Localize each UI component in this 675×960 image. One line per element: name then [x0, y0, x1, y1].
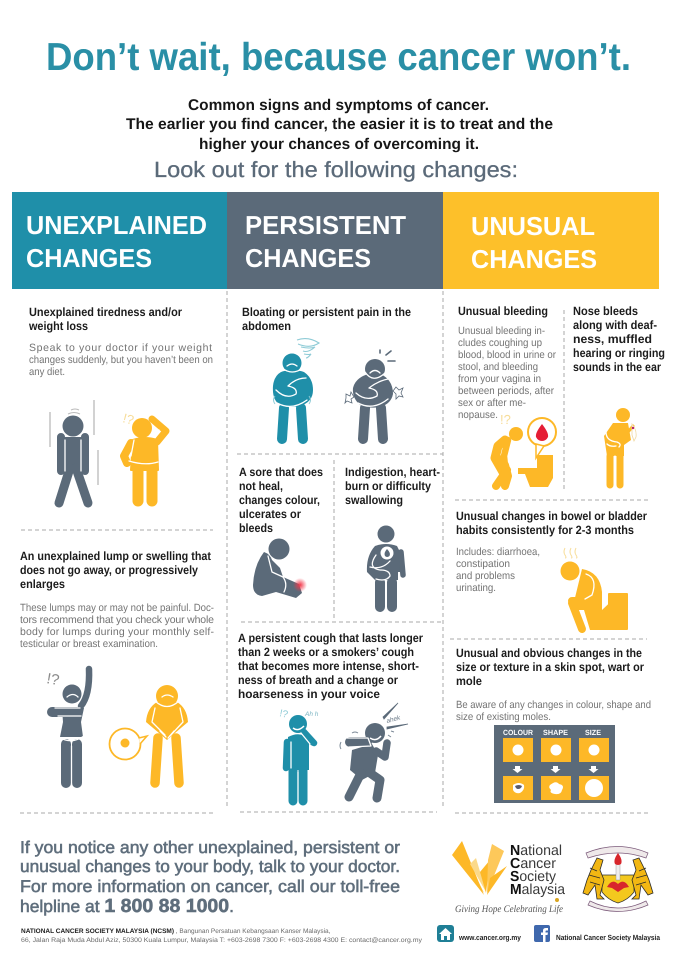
logo: National Cancer Society Malaysia	[452, 841, 566, 915]
banner: unusual changes: UNUSUAL	[471, 211, 595, 241]
icon: teal coughing figure	[278, 708, 319, 806]
text: tiredness: any diet.	[29, 366, 65, 378]
icon: grey figure coughing hard: ahek	[386, 714, 402, 725]
heading: tiredness: weight loss	[28, 319, 88, 333]
intro text	[126, 97, 553, 153]
text: unusual bleeding: Unusual bleeding in-	[458, 325, 545, 337]
icon: weak grey figure	[50, 400, 98, 503]
panel: bowel changes	[456, 509, 647, 630]
panel: persistent cough	[238, 631, 423, 806]
heading: nose bleeds: ness, muffled	[573, 332, 652, 346]
icon: figure with nose bleed	[604, 408, 636, 488]
panel: sore	[239, 465, 323, 598]
facebook link	[534, 925, 661, 942]
icon: home	[437, 925, 454, 942]
icon: figure bent over toilet with blood: !?	[500, 412, 511, 427]
chart: mole changes grid: SIZE	[585, 728, 601, 737]
logo: National Cancer Society Malaysia: Malaysia	[510, 882, 566, 898]
panel: unexplained tiredness	[28, 305, 213, 505]
text: unusual bleeding: sex or after me-	[458, 397, 526, 409]
icon: figure on toilet	[560, 548, 628, 630]
heading: nose bleeds	[573, 304, 665, 374]
intro text: Common signs and symptoms of cancer.	[188, 97, 489, 114]
icon: thin yellow figure: !?	[121, 410, 136, 428]
text: bowel changes: constipation	[456, 558, 510, 570]
heading: sore: ulcerates or	[239, 507, 301, 521]
heading: cough	[238, 631, 423, 701]
text: lump: These lumps may or may not be painful. Doc-	[20, 602, 214, 614]
heading: lump: enlarges	[20, 577, 65, 591]
icon: teal bloated figure	[273, 339, 319, 439]
panel: indigestion	[345, 465, 440, 612]
logo: National Cancer Society Malaysia: Society	[510, 869, 557, 885]
heading: sore: bleeds	[239, 521, 273, 535]
text: website: www.cancer.org.my	[458, 933, 522, 942]
banner: persistent changes: PERSISTENT	[245, 210, 406, 240]
call to action: If you notice any other unexplained, persistent or	[20, 838, 400, 857]
panel: nose bleeds	[573, 304, 665, 488]
heading: lump	[20, 549, 211, 591]
panel: bloating	[242, 305, 411, 439]
text: bowel changes: Includes: diarrhoea,	[456, 546, 540, 558]
contact address: 66, Jalan Raja Muda Abdul Aziz, 50300 Kuala Lumpur, Malaysia T: +603-2698 7300 F: +603-2698 4300 E: contact@cancer.org.my	[21, 937, 423, 944]
text: bowel changes: urinating.	[456, 582, 496, 594]
heading: tiredness	[28, 305, 182, 333]
call to action: For more information on cancer, call our toll-free	[20, 877, 400, 896]
heading: sore	[239, 465, 323, 535]
text: unusual bleeding: stool, and bleeding	[458, 361, 538, 373]
heading: sore: changes colour,	[239, 493, 320, 507]
chart: mole changes grid: COLOUR	[503, 728, 534, 737]
panel: skin changes	[456, 646, 651, 803]
icon: teal coughing figure: Ah h	[304, 711, 319, 718]
text: facebook: National Cancer Society Malaysia	[556, 933, 661, 942]
banner: unexplained changes	[12, 192, 227, 289]
banner: unusual changes	[443, 192, 659, 289]
heading: skin changes: Unusual and obvious changes in the	[456, 646, 642, 660]
text: unusual bleeding: between periods, after	[458, 385, 554, 397]
heading: bowel changes: habits consistently for 2-3 months	[456, 523, 634, 537]
text: tiredness: Speak to your doctor if your weight	[29, 342, 212, 354]
icon: yellow man bent over	[146, 685, 188, 783]
heading: indigestion	[345, 465, 440, 507]
panel: unusual bleeding	[458, 304, 556, 487]
text: unusual bleeding: blood, blood in urine or	[458, 349, 556, 361]
heading: indigestion: Indigestion, heart-	[345, 465, 440, 479]
heading: sore: A sore that does	[239, 465, 323, 479]
heading: lump: does not go away, or progressively	[20, 563, 198, 577]
call to action: helpline at 1 800 88 1000.	[20, 896, 234, 917]
text: unusual bleeding: cludes coughing up	[458, 337, 542, 349]
text: skin changes: size of existing moles.	[456, 711, 551, 723]
heading: bloating: abdomen	[242, 319, 291, 333]
text: skin changes	[456, 699, 651, 723]
heading: tiredness: Unexplained tiredness and/or	[29, 305, 182, 319]
banner: persistent changes	[227, 192, 443, 289]
heading: nose bleeds: Nose bleeds	[573, 304, 638, 318]
heading: cough: than 2 weeks or a smokers’ cough	[238, 645, 414, 659]
heading: cough: hoarseness in your voice	[238, 687, 380, 701]
heading: skin changes: size or texture in a skin spot, wart or	[456, 660, 644, 674]
intro text: higher your chances of overcoming it.	[199, 136, 479, 153]
icon: grey woman checking armpit: !?	[45, 670, 61, 689]
text: lump: tors recommend that you check your whole	[20, 614, 214, 626]
heading: skin changes	[456, 646, 644, 688]
heading: cough: A persistent cough that lasts longer	[238, 631, 423, 645]
banner: unusual changes: CHANGES	[471, 244, 597, 274]
subheading: Look out for the following changes:	[154, 157, 518, 182]
banner: unexplained changes: UNEXPLAINED	[26, 210, 207, 240]
heading: skin changes: mole	[456, 674, 482, 688]
contact address: NATIONAL CANCER SOCIETY MALAYSIA (NCSM) , Bangunan Persatuan Kebangsaan Kanser Malaysia,	[21, 928, 331, 935]
text: unusual bleeding: from your vagina in	[458, 373, 541, 385]
icon: thin yellow figure	[121, 410, 166, 505]
icon: grey figure in pain	[345, 350, 403, 439]
text: lump	[20, 602, 214, 650]
text: tiredness: changes suddenly, but you haven’t been on	[29, 354, 213, 366]
heading: nose bleeds: hearing or ringing	[573, 346, 665, 360]
icon: seated figure with sore	[253, 538, 307, 598]
contact address	[21, 928, 423, 944]
icon: facebook	[534, 925, 550, 942]
banner: persistent changes: CHANGES	[245, 243, 371, 273]
icon: teal coughing figure: !?	[278, 708, 289, 721]
heading: indigestion: swallowing	[345, 493, 403, 507]
text: bowel changes: and problems	[456, 570, 515, 582]
icon: grey figure coughing hard	[340, 703, 408, 798]
chart: mole changes grid	[494, 725, 615, 803]
text: unusual bleeding: nopause.	[458, 409, 498, 421]
text: tiredness	[29, 342, 213, 378]
logo: Malaysian crest	[583, 846, 653, 912]
text: skin changes: Be aware of any changes in colour, shape and	[456, 699, 651, 711]
intro text: The earlier you find cancer, the easier it is to treat and the	[126, 116, 553, 133]
heading: lump: An unexplained lump or swelling that	[20, 549, 211, 563]
heading: sore: not heal,	[239, 479, 283, 493]
heading: bloating	[242, 305, 411, 333]
text: lump: testicular or breast examination.	[20, 638, 158, 650]
logo: National Cancer Society Malaysia: Giving Hope Celebrating Life	[455, 904, 563, 915]
icon: figure with heartburn	[367, 526, 403, 612]
logo: National Cancer Society Malaysia: National	[510, 843, 562, 859]
heading: bloating: Bloating or persistent pain in the	[242, 305, 411, 319]
icon: lump callout	[110, 728, 147, 760]
text: bowel changes	[456, 546, 540, 594]
title: Don’t wait, because cancer won’t.	[46, 36, 631, 79]
heading: unusual bleeding: Unusual bleeding	[458, 304, 548, 318]
heading: indigestion: burn or difficulty	[345, 479, 431, 493]
logo: National Cancer Society Malaysia: Cancer	[510, 856, 556, 872]
heading: nose bleeds: sounds in the ear	[573, 360, 661, 374]
heading: bowel changes	[456, 509, 647, 537]
text: lump: body for lumps during your monthly self-	[20, 626, 214, 638]
heading: cough: that becomes more intense, short-	[238, 659, 419, 673]
call to action	[20, 838, 400, 917]
panel: unexplained lump	[20, 549, 214, 788]
icon: figure bent over toilet with blood	[495, 412, 556, 487]
chart: mole changes grid: SHAPE	[543, 728, 568, 737]
text: unusual bleeding	[458, 325, 556, 421]
heading: bowel changes: Unusual changes in bowel or bladder	[456, 509, 647, 523]
website link	[437, 925, 522, 942]
icon: grey woman checking armpit	[45, 669, 89, 788]
heading: nose bleeds: along with deaf-	[573, 318, 657, 332]
banner: unexplained changes: CHANGES	[26, 243, 152, 273]
call to action: unusual changes to your body, talk to your doctor.	[20, 857, 400, 876]
heading: cough: ness of breath and a change or	[238, 673, 398, 687]
